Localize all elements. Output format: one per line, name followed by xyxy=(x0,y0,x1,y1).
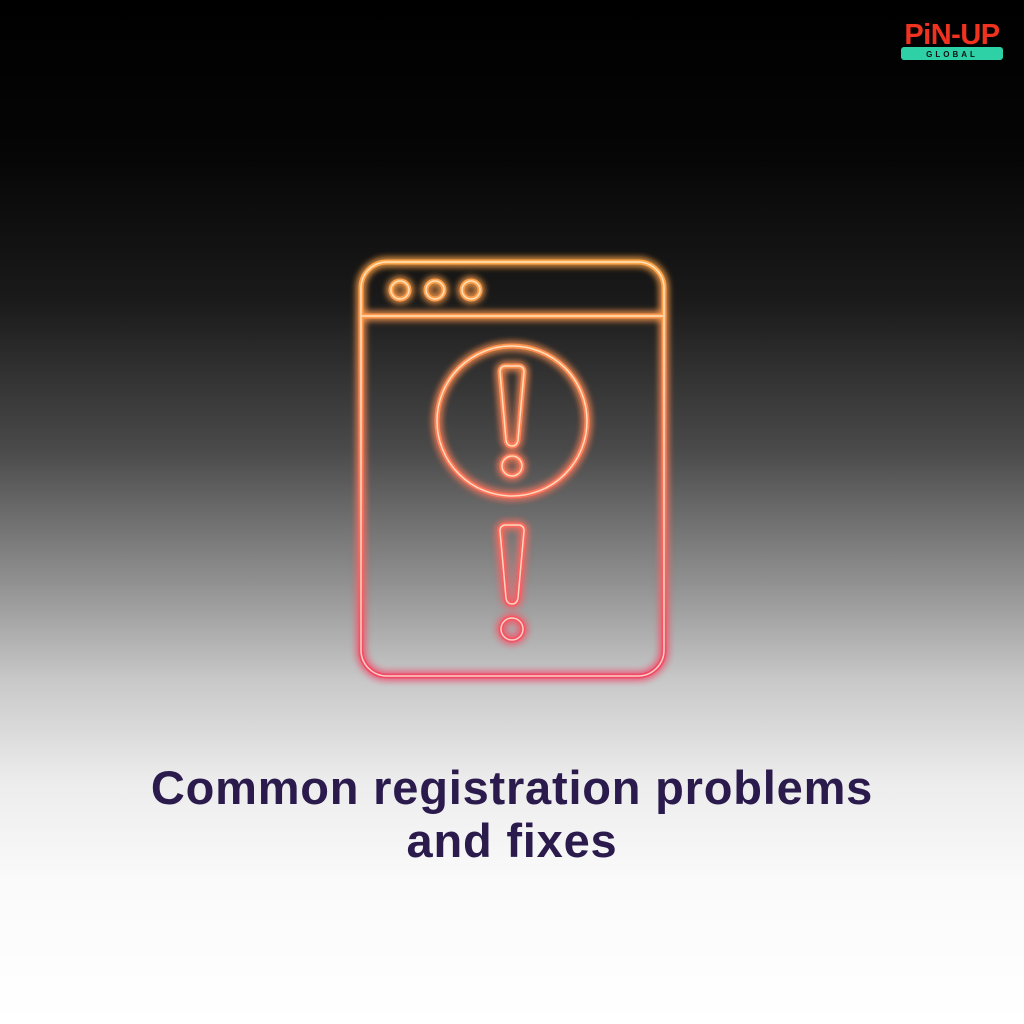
icon: neon browser window with warning xyxy=(351,252,674,686)
logo: PIN-UP GLOBAL: PiN-UP xyxy=(904,19,1000,51)
title: Common registration problems xyxy=(151,761,873,814)
title xyxy=(151,761,873,867)
logo: PIN-UP GLOBAL: GLOBAL xyxy=(926,50,978,59)
title: and fixes xyxy=(407,814,617,867)
